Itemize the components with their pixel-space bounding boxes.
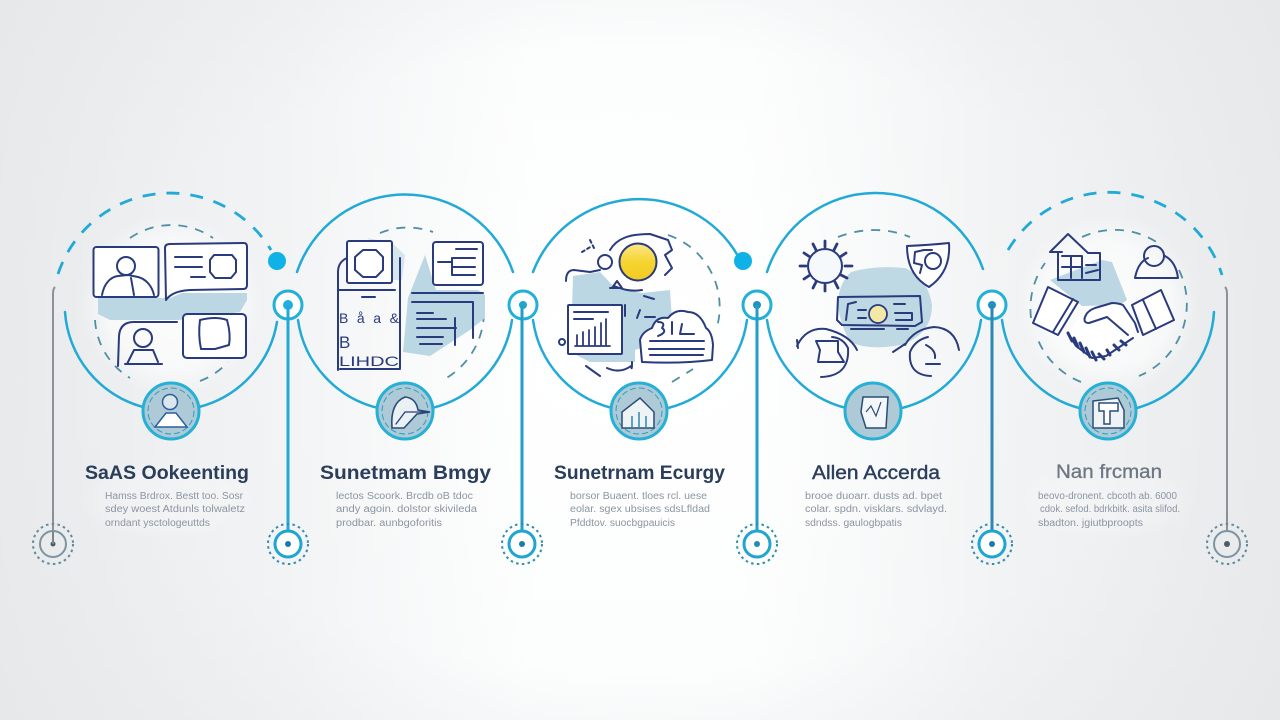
color wash 3 xyxy=(570,272,672,362)
inner dashed arcs 3 xyxy=(668,235,720,382)
document glyphs: Båa& xyxy=(339,310,400,326)
icon: document xyxy=(338,241,400,370)
badge 4 xyxy=(845,383,901,439)
badge 5 xyxy=(1080,383,1136,439)
connector: left grey stem xyxy=(33,287,73,564)
badge 3 xyxy=(611,383,667,439)
color wash 1 xyxy=(98,293,247,320)
body 1: orndant ysctologeuttds xyxy=(105,518,210,529)
inner dashed arcs 1 xyxy=(95,225,228,381)
connector dot: upper right xyxy=(734,252,752,270)
icon: right cuff xyxy=(1132,290,1174,335)
heading 5: Nan frcman xyxy=(1056,462,1162,483)
connector: junction 2 xyxy=(502,291,542,564)
panel 5 xyxy=(1002,192,1222,439)
color wash 5 xyxy=(1050,260,1127,306)
inner dashed circle 5 xyxy=(1030,230,1187,382)
icon: chat card xyxy=(183,314,246,358)
body 3 xyxy=(570,491,710,529)
body 4: sdndss. gaulogbpatis xyxy=(805,518,902,529)
body 5: cdok. sefod. bdrkbitk. asita slifod. xyxy=(1040,504,1180,515)
outer arc 3 xyxy=(533,199,738,272)
icon: video card person xyxy=(94,247,158,297)
body 2 xyxy=(336,491,477,529)
icon: person xyxy=(1135,246,1178,278)
connector: junction 1 xyxy=(268,291,308,564)
panel 4 xyxy=(767,193,983,439)
icon: user node xyxy=(566,255,622,288)
heading 4: Allen Accerda xyxy=(812,463,940,484)
inner dashed arcs 2 xyxy=(380,228,484,380)
outer dashed arc 5 xyxy=(1008,192,1222,275)
icon: sparks xyxy=(582,240,594,252)
heading 2: Sunetmam Bmgy xyxy=(320,463,491,484)
body 2: lectos Scoork. Brcdb oB tdoc xyxy=(336,491,473,502)
heading 3: Sunetrnam Ecurgy xyxy=(554,463,725,484)
outer arc 2 xyxy=(297,194,513,272)
lower solid arc 1 xyxy=(65,312,277,407)
icon: device xyxy=(837,296,922,329)
connector: junction 3 xyxy=(737,291,777,564)
color wash 4 xyxy=(838,267,932,347)
body 3: borsor Buaent. tloes rcl. uese xyxy=(570,491,707,502)
lower arc 3 xyxy=(533,320,747,408)
color wash 2 xyxy=(403,255,485,356)
text block 4 xyxy=(805,463,947,529)
body 4 xyxy=(805,491,947,529)
icon: speech bubble xyxy=(165,243,247,300)
body 1: sdey woest Atdunls tolwaletz xyxy=(105,504,245,515)
body 2: prodbar. aunbgoforitis xyxy=(336,518,442,529)
document glyph B: B xyxy=(339,333,350,352)
body 3: Pfddtov. suocbgpauicis xyxy=(570,518,675,529)
body 4: colar. spdn. visklars. sdvlayd. xyxy=(805,504,947,515)
lower arc 4 xyxy=(767,320,981,408)
icon: cloud card xyxy=(640,311,713,363)
icon: sun gear xyxy=(610,234,672,291)
outer dashed arc 1 xyxy=(58,193,271,274)
document glyph row: LIHDC xyxy=(339,353,399,369)
icon: left hand arc xyxy=(797,329,857,377)
icon: connector marks xyxy=(586,296,655,376)
icon: sun xyxy=(800,241,852,291)
body 5 xyxy=(1038,491,1180,529)
icon: right hand arc xyxy=(893,327,959,376)
lower arc 5 xyxy=(1002,312,1214,408)
panel 1: SaaS xyxy=(58,193,277,439)
icon: left cuff xyxy=(1033,287,1078,335)
body 1: Hamss Brdrox. Bestt too. Sosr xyxy=(105,491,244,502)
body 5: sbadton. jgiutbproopts xyxy=(1038,518,1143,529)
outer arc 4 xyxy=(767,193,983,272)
icon: chart card xyxy=(559,305,622,354)
icon: shield xyxy=(907,243,949,287)
panel 2 xyxy=(297,194,513,439)
panel 3 xyxy=(533,199,747,439)
text block 2 xyxy=(320,463,491,529)
text block 1 xyxy=(85,463,249,529)
connector: junction 4 xyxy=(972,291,1012,564)
badge 2 xyxy=(377,383,433,439)
icon: tree card xyxy=(433,242,483,285)
body 5: beovo-dronent. cbcoth ab. 6000 xyxy=(1038,491,1177,502)
connector: right grey stem xyxy=(1207,287,1247,564)
badge 1 xyxy=(143,383,199,439)
connector dot: upper left xyxy=(268,252,286,270)
icon: house xyxy=(1050,234,1100,280)
body 3: eolar. sgex ubsises sdsLfldad xyxy=(570,504,710,515)
body 1 xyxy=(105,491,245,529)
text block 5 xyxy=(1038,462,1180,529)
text block 3 xyxy=(554,463,725,529)
soft glow behind first and last panels xyxy=(77,215,1198,540)
icon: handshake xyxy=(1068,303,1138,360)
heading 1: SaAS Ookeenting xyxy=(85,463,249,484)
icon: person outline xyxy=(118,322,177,366)
body 2: andy agoin. dolstor skivileda xyxy=(336,504,477,515)
color wash 2b xyxy=(368,238,405,280)
inner dashed arc 4 xyxy=(838,230,910,237)
icon: text sheet xyxy=(412,293,483,345)
lower arc 2 xyxy=(298,320,512,408)
body 4: brooe duoarr. dusts ad. bpet xyxy=(805,491,942,502)
